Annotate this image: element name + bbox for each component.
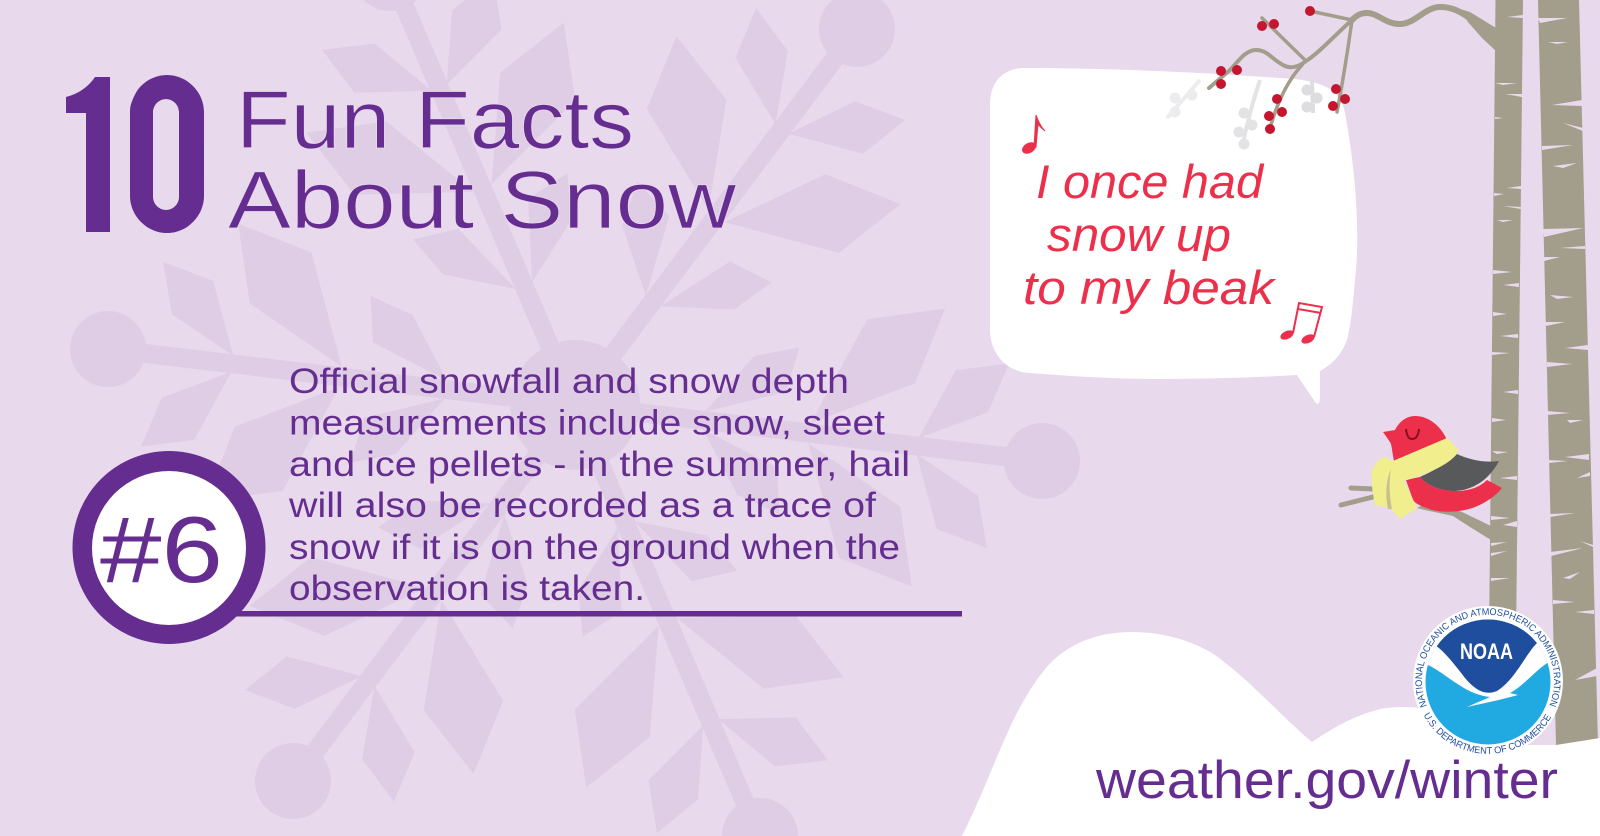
perch branch xyxy=(1341,488,1491,540)
speech bubble text: to my beak xyxy=(1023,261,1277,314)
fact text block: observation is taken. xyxy=(289,569,645,608)
NOAA logo: U.S. DEPARTMENT OF COMMERCE xyxy=(1424,712,1552,754)
snow shadow twigs on bubble xyxy=(1167,80,1322,149)
fact text block xyxy=(288,362,910,608)
head xyxy=(1383,416,1447,461)
wing xyxy=(1420,454,1499,491)
fact text block: will also be recorded as a trace of xyxy=(288,486,876,525)
title xyxy=(66,75,736,233)
title number 10: 1 xyxy=(51,37,141,278)
speech bubble xyxy=(990,68,1357,404)
fact text block: snow if it is on the ground when the xyxy=(289,528,900,567)
icon: single music note xyxy=(1020,115,1045,156)
NOAA logo: NATIONAL OCEANIC AND ATMOSPHERIC ADMINISTRATION xyxy=(1415,608,1561,708)
website url: weather.gov/winter xyxy=(1095,751,1558,810)
speech bubble text xyxy=(1023,155,1277,314)
title number 10: 0 xyxy=(124,38,213,279)
icon: beamed music notes xyxy=(1279,303,1322,346)
trunk left xyxy=(1489,0,1523,640)
title words: About Snow xyxy=(228,155,737,246)
NOAA logo: NOAA xyxy=(1460,639,1513,664)
scarf xyxy=(1372,438,1458,519)
tree branch with berries xyxy=(1209,6,1496,134)
branch xyxy=(1209,7,1496,128)
eye xyxy=(1406,429,1419,439)
berries xyxy=(1216,6,1350,134)
fact text block: measurements include snow, sleet xyxy=(289,404,885,442)
fact text block: Official snowfall and snow depth xyxy=(289,362,849,401)
background snowflake xyxy=(70,0,1080,836)
speech bubble text: I once had xyxy=(1036,155,1265,208)
NOAA logo xyxy=(1413,606,1563,754)
title words: Fun Facts xyxy=(236,75,634,166)
bird on perch xyxy=(1341,416,1502,540)
speech bubble text: snow up xyxy=(1047,208,1231,261)
fact underline xyxy=(235,611,962,616)
title number 10 xyxy=(66,75,204,233)
trunk right xyxy=(1538,0,1598,745)
fact text block: and ice pellets - in the summer, hail xyxy=(289,445,910,484)
fact number badge xyxy=(72,451,266,644)
scarf fold xyxy=(1386,469,1392,509)
fact number badge: #6 xyxy=(100,497,223,602)
title words xyxy=(228,75,737,246)
tree trunks xyxy=(1489,0,1598,745)
snow drift xyxy=(962,632,1600,836)
tail and belly xyxy=(1406,477,1502,512)
bark marks xyxy=(1491,15,1597,680)
